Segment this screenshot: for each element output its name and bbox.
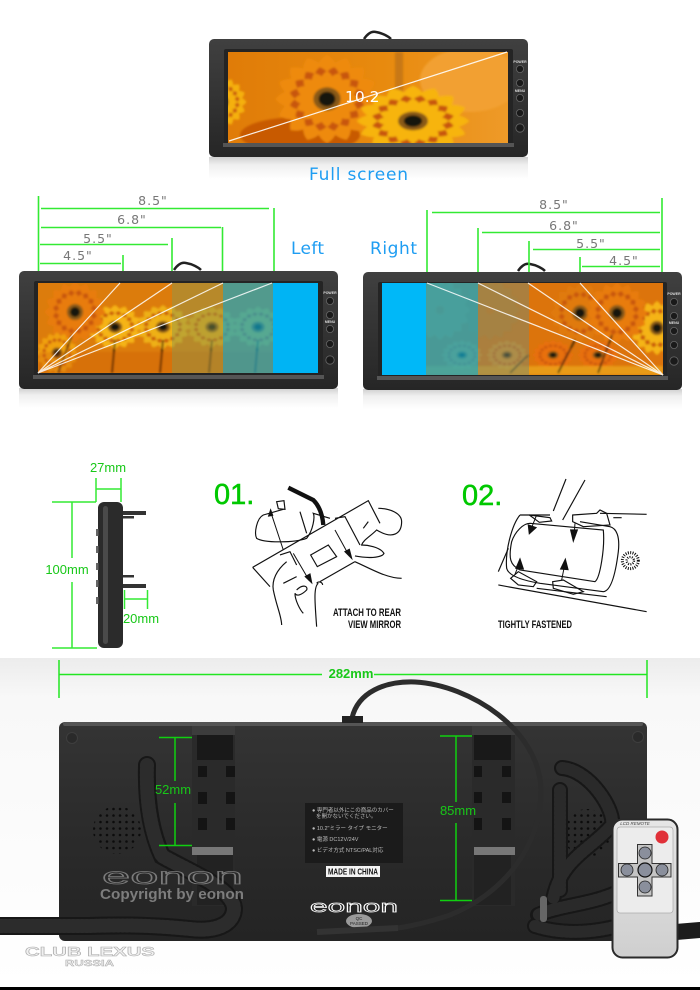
plug: [540, 896, 547, 922]
side bumps: [96, 529, 98, 604]
dimension labels: [45, 460, 159, 626]
screen image with flowers: [228, 52, 508, 143]
screen image with tinted slices: [36, 282, 318, 374]
spec label plate: を開かないでください。: [316, 813, 376, 820]
top edge highlight: [63, 722, 643, 726]
dimension labels: 27mm: [90, 460, 126, 475]
panel: side view of monitor: [45, 460, 159, 648]
dimension lines: left: [38, 196, 274, 271]
side buttons: [516, 65, 524, 132]
qc passed sticker: QC: [356, 916, 363, 921]
reflection: [19, 388, 338, 408]
arrows: [271, 512, 349, 581]
size label: 10.2: [345, 88, 380, 106]
qc passed sticker: PASSED: [350, 921, 369, 926]
button labels: MENU: [515, 89, 526, 93]
remote control: [612, 820, 678, 958]
side buttons: [326, 297, 334, 364]
dimension lines: right: [427, 198, 662, 272]
remote title: LCD REMOTE: [620, 821, 651, 826]
made in china tag: [326, 866, 380, 877]
dimension lines: [52, 478, 148, 648]
panel: rear of monitor: [59, 722, 647, 941]
caption: ATTACH TO REAR: [333, 607, 401, 619]
illustration: attach to rear view mirror: [253, 488, 402, 631]
made in china tag: MADE IN CHINA: [328, 868, 378, 876]
speaker grille left: [93, 806, 141, 854]
bezel: [363, 272, 682, 390]
watermark: eonon: eonon: [102, 863, 243, 889]
spec label plate: ● 電源 DC12V/24V: [312, 835, 359, 843]
panel: left monitor: [19, 263, 338, 408]
body: [98, 502, 123, 648]
watermark: copyright: Copyright by eonon: [100, 887, 244, 903]
diagonal size line: [229, 52, 507, 141]
corner screws: [66, 732, 644, 744]
spec label plate: ● 10.2"ミラー タイプ モニター: [312, 824, 388, 832]
heading: step 02: 02.: [462, 480, 502, 512]
spec label plate: ● ビデオ方式 NTSC/PAL対応: [312, 846, 384, 854]
cable clamp: [342, 716, 363, 723]
dimension labels: right: 6.8": [549, 218, 579, 233]
dimension labels: left: [63, 193, 168, 263]
bottom black edge: [0, 987, 700, 990]
watermark: eonon: [100, 863, 244, 903]
caption: left: Left: [291, 239, 324, 259]
speaker grille: [622, 553, 638, 569]
right bracket: [472, 726, 515, 906]
button labels: POWER: [323, 291, 337, 295]
dimension labels: 20mm: [123, 611, 159, 626]
rear view mirror: [256, 501, 330, 542]
button labels: [513, 60, 527, 93]
caption: VIEW MIRROR: [348, 619, 401, 631]
watermark: club lexus: CLUB LEXUS: [25, 944, 156, 959]
reflection: [363, 389, 682, 409]
monitor plate: [253, 501, 380, 587]
windshield struts and lines: [498, 479, 647, 612]
cable: [317, 682, 547, 932]
dimension labels: left: 5.5": [83, 231, 113, 246]
power button: [656, 830, 668, 844]
speaker grille right: [563, 809, 611, 857]
dimension: 282mm: 282mm: [329, 666, 373, 681]
dimension: 52mm: 52mm: [155, 782, 191, 797]
housing: [59, 722, 647, 941]
button labels: POWER: [667, 292, 681, 296]
dimension: 85mm: [440, 736, 476, 900]
button panel: [617, 827, 673, 913]
dimension labels: 100mm: [45, 562, 89, 577]
button labels: POWER: [513, 60, 527, 64]
cable loop: [174, 263, 201, 270]
panel: full screen monitor: [197, 32, 528, 179]
dimension: 52mm: [155, 737, 192, 846]
cable loop: [518, 264, 545, 271]
button labels: [667, 292, 681, 325]
screen image with tinted slices: [382, 280, 684, 375]
caption: full screen: Full screen: [309, 165, 408, 185]
connector: [317, 928, 398, 932]
caption: right: Right: [370, 239, 417, 259]
dimension labels: right: 8.5": [539, 197, 569, 212]
spec label plate: [305, 803, 403, 863]
mirror cable: [288, 488, 323, 525]
caption: TIGHTLY FASTENED: [498, 619, 572, 631]
brackets: [122, 511, 146, 588]
caption: [333, 607, 401, 631]
remote body: [612, 820, 678, 958]
dimension labels: right: [539, 197, 639, 268]
dimension labels: right: 4.5": [609, 253, 639, 268]
watermark: club lexus: [25, 944, 156, 968]
clips: [511, 510, 610, 594]
button labels: MENU: [325, 320, 336, 324]
button labels: MENU: [669, 321, 680, 325]
mirror outlines: [506, 515, 619, 597]
left bracket: [192, 726, 235, 906]
d-pad: [618, 844, 671, 896]
panel: right monitor: [363, 264, 684, 409]
dimension: 282mm: [59, 660, 647, 698]
qc passed sticker: [346, 914, 372, 928]
fan lines: [427, 283, 663, 375]
dimension: 85mm: 85mm: [440, 803, 476, 818]
dimension labels: right: 5.5": [576, 236, 606, 251]
monitor reflection: [209, 157, 528, 179]
heading: step 01: 01.: [214, 479, 254, 511]
dimension labels: left: 6.8": [117, 212, 147, 227]
panel: rear view photo background: [0, 658, 700, 987]
spec label plate: ● 専門者以外にこの商品のカバー: [312, 806, 394, 814]
cable loop on top: [364, 32, 391, 39]
watermark: club lexus: RUSSIA: [65, 959, 114, 968]
arrows: [515, 515, 575, 580]
button labels: [323, 291, 337, 324]
brand logo: eonon: [310, 897, 398, 916]
straps: [0, 765, 700, 932]
bezel: [19, 271, 338, 389]
dimension labels: left: 4.5": [63, 248, 93, 263]
monitor bezel: [209, 39, 528, 157]
side buttons: [670, 298, 678, 365]
body highlight: [103, 506, 108, 644]
illustration: tightly fastened: [498, 479, 647, 631]
dimension labels: left: 8.5": [138, 193, 168, 208]
fan lines: [38, 283, 272, 373]
hands: [355, 508, 402, 578]
